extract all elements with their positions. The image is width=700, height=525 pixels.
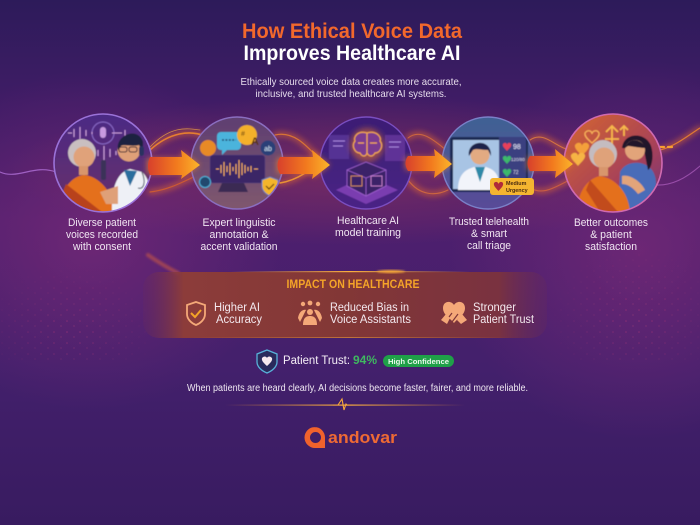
caption: annotation & xyxy=(210,229,269,241)
illustration: waveform monitor and language bubbles: # xyxy=(241,131,245,138)
step 3: model training xyxy=(318,115,414,239)
confidence pill: High Confidence xyxy=(388,357,449,366)
illustration: patient and doctor recording xyxy=(55,114,150,212)
logo mark xyxy=(304,427,325,448)
caption xyxy=(66,217,138,253)
caption: accent validation xyxy=(200,241,278,253)
confidence pill xyxy=(383,355,454,367)
arrow 3 xyxy=(405,149,452,178)
item: reduced bias: Voice Assistants xyxy=(330,314,411,326)
icon: shield heart xyxy=(257,350,277,373)
caption xyxy=(574,217,648,253)
step 4: telehealth triage xyxy=(440,115,538,252)
caption: Trusted telehealth xyxy=(449,216,529,228)
title: Improves Healthcare AI xyxy=(244,42,460,65)
item: higher AI accuracy xyxy=(214,302,262,326)
caption: & smart xyxy=(471,228,507,240)
caption: Healthcare AI xyxy=(337,215,399,227)
flowing sound waves xyxy=(0,128,700,273)
caption: call triage xyxy=(467,240,511,252)
title xyxy=(242,20,462,65)
caption: satisfaction xyxy=(585,241,637,253)
badge: medium urgency: Medium xyxy=(506,181,527,187)
subtitle xyxy=(240,76,462,100)
illustration: telehealth tablet with vitals: 72 xyxy=(513,170,519,176)
step 2: linguistic annotation xyxy=(188,115,286,253)
caption xyxy=(335,215,401,239)
icon: shield check xyxy=(187,302,205,325)
caption xyxy=(200,217,278,253)
arrow 2 xyxy=(277,150,330,179)
panel: impact on healthcare xyxy=(143,270,547,338)
caption: with consent xyxy=(72,241,131,253)
icon: people group xyxy=(298,301,322,325)
caption: model training xyxy=(335,227,401,239)
subtitle: inclusive, and trusted healthcare AI systems. xyxy=(256,88,446,100)
icon: heart handshake xyxy=(441,302,467,326)
title: How Ethical Voice Data xyxy=(242,20,462,43)
illustration: glowing brain over chip xyxy=(321,118,411,208)
closing statement: When patients are heard clearly, AI decisions become faster, fairer, and more reliable. xyxy=(187,383,528,394)
item: reduced bias xyxy=(330,302,411,326)
item: higher AI accuracy: Accuracy xyxy=(216,314,262,326)
illustration: waveform monitor and language bubbles: A xyxy=(251,136,259,148)
panel heading: IMPACT ON HEALTHCARE xyxy=(286,277,420,291)
caption: Better outcomes xyxy=(574,217,648,229)
item: higher AI accuracy: Higher AI xyxy=(214,302,260,314)
illustration: telehealth tablet with vitals xyxy=(443,118,533,208)
subtitle: Ethically sourced voice data creates more accurate, xyxy=(240,76,462,88)
item: reduced bias: Reduced Bias in xyxy=(330,302,409,314)
arrow 4 xyxy=(527,149,573,178)
caption: Expert linguistic xyxy=(202,217,276,229)
caption: voices recorded xyxy=(66,229,138,241)
illustration: telehealth tablet with vitals: 98 xyxy=(513,144,521,151)
illustration: telehealth tablet with vitals: 120/80 xyxy=(511,157,525,162)
trust label: Patient Trust: xyxy=(283,355,350,367)
logo wordmark: andovar xyxy=(328,428,397,447)
illustration: waveform monitor and language bubbles xyxy=(192,118,282,208)
arrow 1 xyxy=(147,150,200,179)
badge: medium urgency xyxy=(490,178,534,195)
step 5: better outcomes xyxy=(560,112,666,253)
trust value: 94% xyxy=(353,355,377,367)
andovar logo xyxy=(304,427,397,448)
caption: & patient xyxy=(590,229,632,241)
item: stronger patient trust xyxy=(473,302,535,326)
step 1: diverse patient voices xyxy=(53,113,152,250)
illustration: waveform monitor and language bubbles: ab xyxy=(264,146,272,153)
illustration: patient with caregiver and hearts xyxy=(565,114,662,212)
caption xyxy=(449,216,529,252)
divider with pulse xyxy=(225,399,465,410)
caption: Diverse patient xyxy=(68,217,136,229)
item: stronger patient trust: Stronger xyxy=(473,302,516,314)
badge: medium urgency: Urgency xyxy=(506,188,528,194)
item: stronger patient trust: Patient Trust xyxy=(473,314,535,326)
patient trust metric xyxy=(257,350,454,373)
